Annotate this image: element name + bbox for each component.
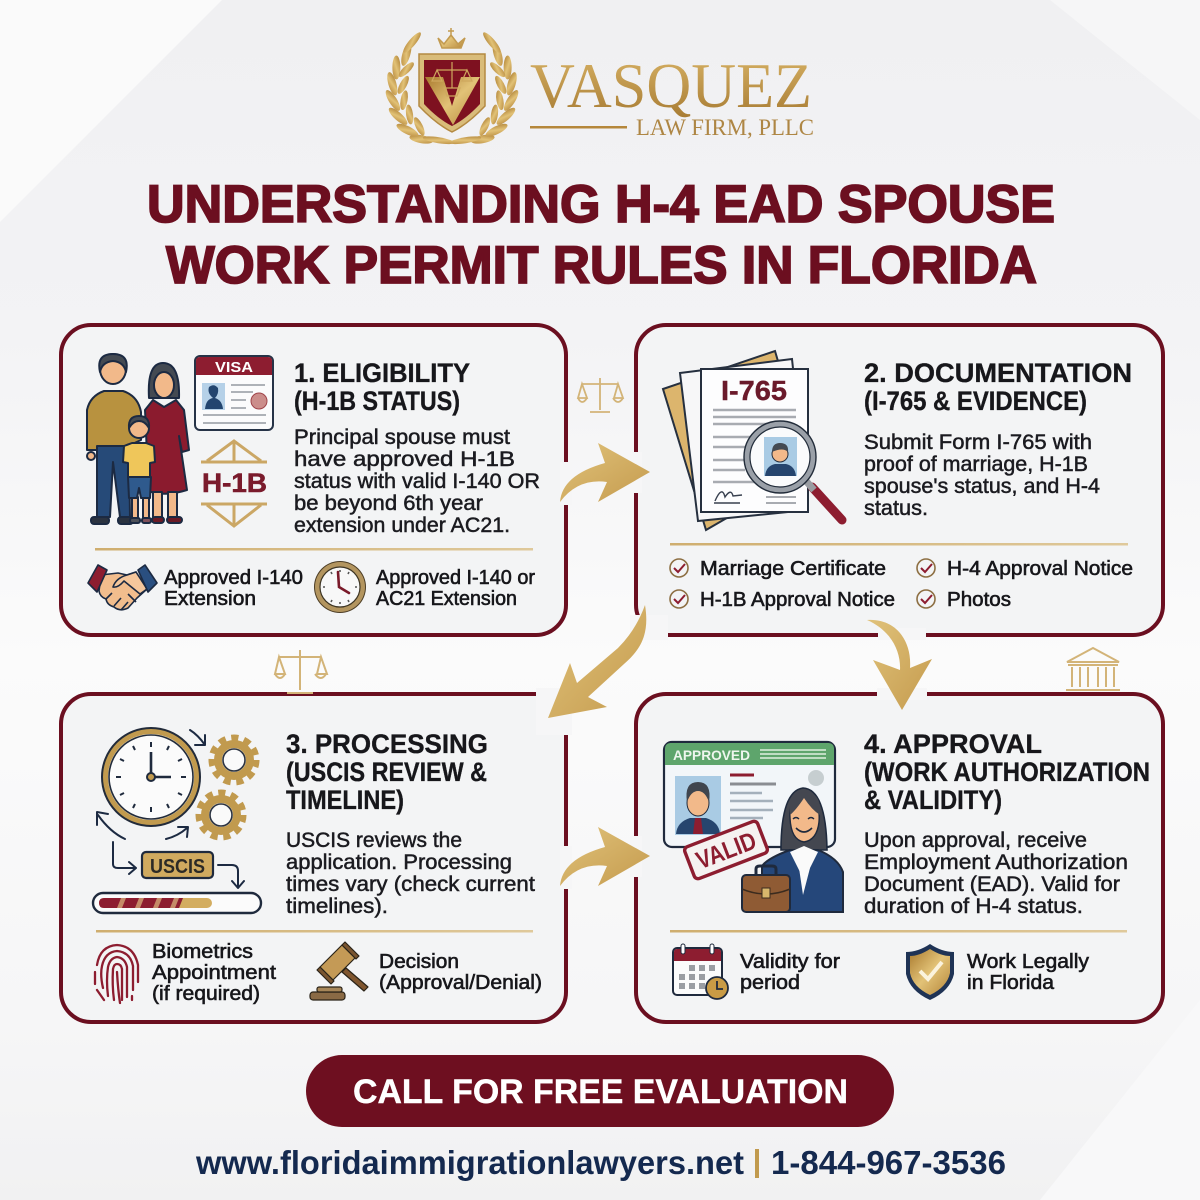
label: approved extension: Extension — [164, 588, 256, 610]
logo subtitle: LAW FIRM, PLLC — [636, 115, 814, 140]
body text 4: duration of H-4 status. — [864, 895, 1083, 918]
label: decision: Decision — [379, 951, 459, 973]
heading 2: (I-765 & EVIDENCE) — [864, 386, 1087, 416]
icon: courthouse — [1066, 648, 1120, 690]
heading 2 — [864, 358, 1132, 416]
heading 4: & VALIDITY) — [864, 785, 1002, 815]
logo wordmark: VASQUEZ — [530, 50, 812, 121]
heading 3: (USCIS REVIEW & — [286, 757, 487, 787]
icon: clock, gears and USCIS timeline: USCIS — [150, 856, 205, 878]
panel: 3 processing — [61, 694, 566, 1022]
body text 3: times vary (check current — [286, 873, 535, 896]
body text 2: spouse's status, and H-4 — [864, 475, 1100, 498]
body text 1: extension under AC21. — [294, 514, 510, 537]
icon: clock — [314, 561, 366, 613]
icon: laurel wreath — [383, 30, 521, 146]
body text 4: Employment Authorization — [864, 851, 1128, 874]
body text 1: Principal spouse must — [294, 426, 510, 449]
button: call for free evaluation: CALL FOR FREE EVALUATION — [353, 1073, 848, 1111]
icon: scales left — [275, 650, 327, 693]
checklist labels: Photos — [947, 589, 1011, 611]
heading 1: (H-1B STATUS) — [294, 386, 460, 416]
body text 3: USCIS reviews the — [286, 829, 462, 852]
panel 2 frame — [636, 325, 1163, 635]
checklist labels — [700, 558, 1133, 611]
icon: I-765 document with magnifier — [663, 351, 842, 530]
body text 1: have approved H-1B — [294, 448, 515, 471]
icon: gavel — [310, 942, 368, 1000]
body text 1: be beyond 6th year — [294, 492, 483, 515]
label: decision — [379, 951, 542, 994]
arrow: step 2 to 4 — [867, 620, 932, 710]
icon: visa card — [195, 356, 273, 430]
panel 1 frame — [61, 325, 566, 635]
body text 4: Upon approval, receive — [864, 829, 1087, 852]
panel: 4 approval — [636, 694, 1163, 1022]
heading 3: 3. PROCESSING — [286, 729, 488, 759]
title — [147, 175, 1055, 295]
label: validity: Validity for — [740, 951, 840, 973]
label: biometrics: Biometrics — [152, 941, 253, 963]
label: decision: (Approval/Denial) — [379, 972, 542, 994]
button: call for free evaluation — [306, 1055, 894, 1127]
label: work legally: Work Legally — [967, 951, 1089, 973]
contact line — [195, 1144, 1006, 1181]
body text 4: Document (EAD). Valid for — [864, 873, 1120, 896]
arrow: step 1 to 2 — [560, 443, 650, 502]
logo: Vasquez Law Firm — [383, 28, 814, 146]
body text 1: status with valid I-140 OR — [294, 470, 540, 493]
title: WORK PERMIT RULES IN FLORIDA — [166, 236, 1037, 295]
heading 3 — [286, 729, 488, 815]
icon: handshake — [88, 565, 157, 610]
label: AC21 extension: AC21 Extension — [376, 588, 517, 610]
label: AC21 extension: Approved I-140 or — [376, 567, 535, 589]
label: validity: period — [740, 972, 800, 994]
checklist labels: H-1B Approval Notice — [700, 589, 895, 611]
body text 2: Submit Form I-765 with — [864, 431, 1092, 454]
panel: 1 eligibility — [61, 325, 566, 635]
icon: H-1B badge — [201, 441, 267, 526]
body text 3: application. Processing — [286, 851, 512, 874]
checklist labels: H-4 Approval Notice — [947, 558, 1133, 580]
icon: fingerprint — [95, 945, 138, 1003]
icon: I-765 document with magnifier: I-765 — [721, 375, 787, 406]
label: approved extension — [164, 567, 303, 610]
contact line: www.floridaimmigrationlawyers.net — [195, 1144, 744, 1181]
icon: approved card with woman: APPROVED — [673, 747, 750, 763]
heading 3: TIMELINE) — [286, 785, 404, 815]
checklist labels: Marriage Certificate — [700, 558, 886, 580]
icon: clock, gears and USCIS timeline — [93, 728, 261, 913]
arrow: step 2 to 3 — [548, 605, 646, 718]
heading 4: 4. APPROVAL — [864, 729, 1042, 759]
label: biometrics: Appointment — [152, 962, 276, 984]
icon: approved card with woman: VALID — [692, 827, 760, 875]
icon: scales near arrow — [578, 378, 623, 412]
panel 4 frame — [636, 694, 1163, 1022]
icon: shield check — [906, 944, 954, 1000]
label: validity — [740, 951, 840, 994]
heading 2: 2. DOCUMENTATION — [864, 358, 1132, 388]
body text 2 — [864, 431, 1100, 520]
heading 4: (WORK AUTHORIZATION — [864, 757, 1150, 787]
heading 1: 1. ELIGIBILITY — [294, 358, 470, 388]
arrow: step 3 to 4 — [560, 827, 650, 886]
label: biometrics: (if required) — [152, 983, 260, 1005]
icon: calendar — [673, 944, 728, 999]
checklist — [670, 558, 1133, 611]
heading 1 — [294, 358, 470, 416]
logo rule — [530, 126, 627, 128]
icon: shield — [419, 54, 485, 132]
label: biometrics — [152, 941, 276, 1005]
panel 3 frame — [61, 694, 566, 1022]
contact line: 1-844-967-3536 — [771, 1144, 1006, 1181]
icon: approved card with woman — [664, 742, 843, 912]
body text 3 — [286, 829, 535, 918]
body text 1 — [294, 426, 540, 537]
icons: check marks — [670, 559, 935, 608]
heading 4 — [864, 729, 1150, 815]
icon: visa card: VISA — [215, 359, 253, 376]
border gaps for arrows — [536, 452, 927, 889]
icon: crown — [438, 28, 465, 48]
label: work legally — [967, 951, 1089, 994]
panel: 2 documentation — [636, 325, 1163, 635]
title: UNDERSTANDING H-4 EAD SPOUSE — [147, 175, 1055, 234]
label: approved extension: Approved I-140 — [164, 567, 303, 589]
label: AC21 extension — [376, 567, 535, 610]
label: work legally: in Florida — [967, 972, 1055, 994]
body text 3: timelines). — [286, 895, 388, 918]
body text 2: proof of marriage, H-1B — [864, 453, 1088, 476]
icon: family — [87, 354, 189, 524]
icon: H-1B badge: H-1B — [202, 468, 267, 498]
body text 2: status. — [864, 497, 928, 520]
body text 4 — [864, 829, 1128, 918]
